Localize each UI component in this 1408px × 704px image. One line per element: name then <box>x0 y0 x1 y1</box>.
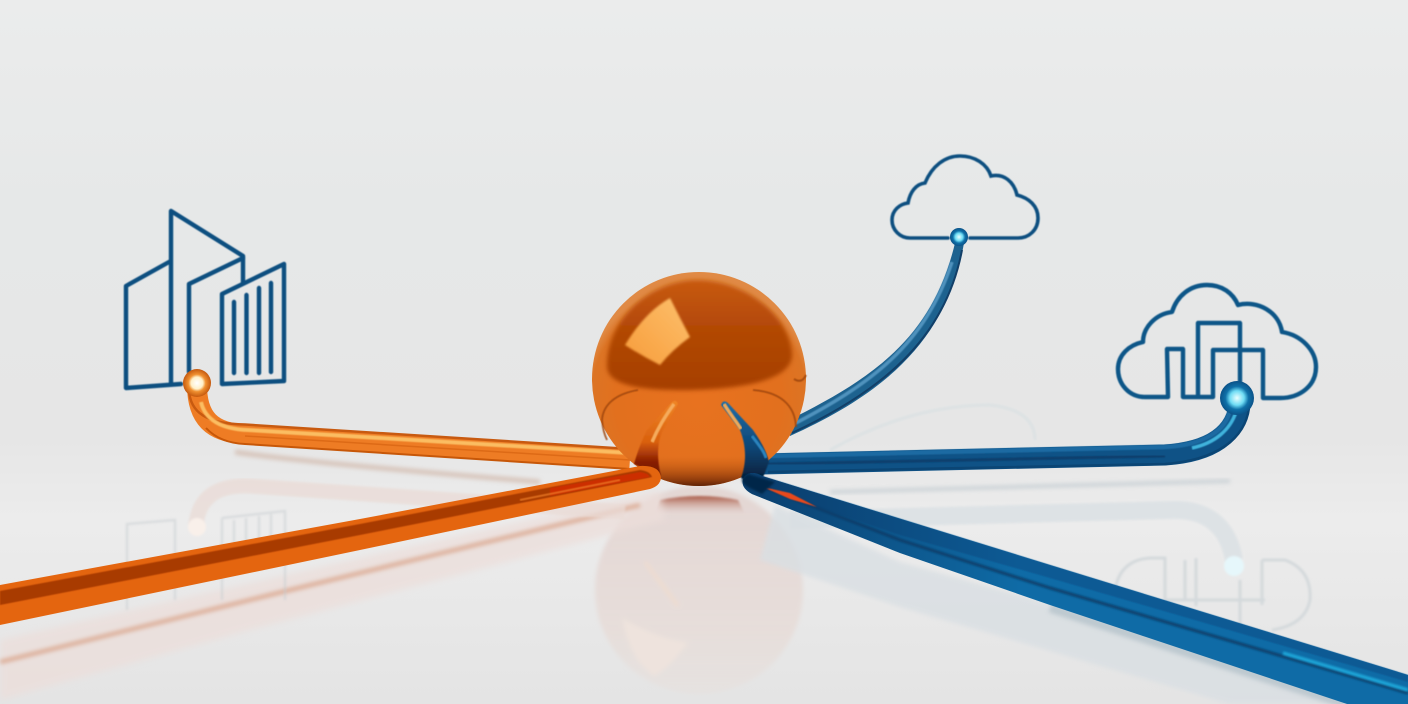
tube: blue to plain cloud <box>785 243 964 436</box>
node: plain cloud <box>950 228 968 246</box>
reflection: building icon <box>127 511 285 610</box>
icon: cloud with city <box>1118 285 1316 398</box>
tube: short orange on sphere <box>634 401 678 476</box>
sphere: dark upper reflection <box>607 280 792 390</box>
sphere: floor reflection arcs <box>602 375 806 440</box>
icon: office buildings <box>126 211 284 388</box>
floor reflections <box>0 405 1408 704</box>
reflection: thin cloud tube <box>830 405 1035 450</box>
sphere body <box>592 272 806 486</box>
tube: long blue <box>742 473 1408 704</box>
reflection: orange tube to buildings <box>196 486 625 525</box>
reflection: cloud node <box>1224 556 1244 576</box>
reflection: cloud icon <box>1115 558 1310 630</box>
tube: short blue on sphere <box>721 401 769 485</box>
sphere: window highlight <box>625 298 690 365</box>
reflection: glowing node orange <box>188 518 206 536</box>
reflection: long orange tube band <box>0 490 665 700</box>
reflection: long orange tube line <box>0 505 640 662</box>
sphere: shaded underside <box>592 272 806 486</box>
reflection: blue tube to cloud <box>790 510 1234 560</box>
icon: plain cloud <box>892 156 1038 238</box>
contact shadow: blue tube <box>830 481 1230 492</box>
tube: orange to buildings <box>189 385 630 469</box>
reflection: sphere <box>595 486 803 694</box>
tube: blue to city cloud <box>760 400 1249 472</box>
node: buildings <box>183 369 211 397</box>
tube: long orange <box>0 466 661 625</box>
node: city cloud <box>1220 381 1254 415</box>
reflection: long blue tube band <box>760 505 1408 704</box>
contact shadow: orange tube <box>235 452 540 482</box>
reflection: sphere contact <box>655 496 745 514</box>
sphere <box>592 272 806 486</box>
shadow: long blue tube <box>1050 608 1345 704</box>
